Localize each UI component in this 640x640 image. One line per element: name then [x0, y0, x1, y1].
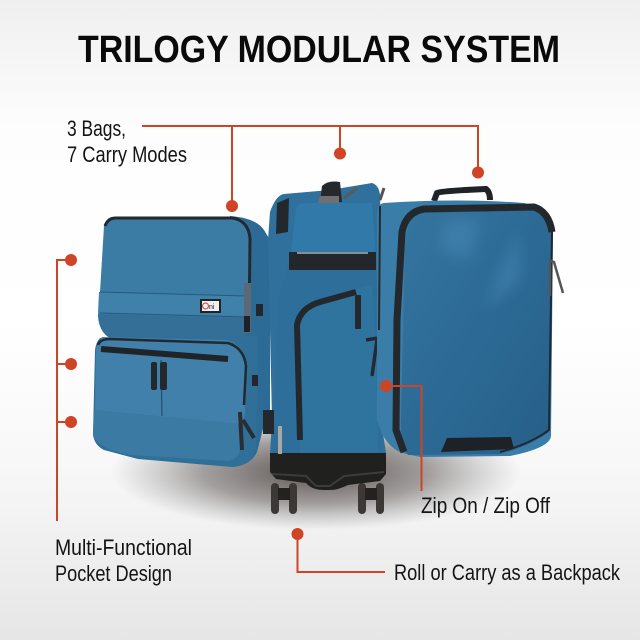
- callout: pocket connector: [57, 260, 71, 521]
- label: 3 Bags, 7 Carry Modes: 3 Bags,: [67, 116, 126, 141]
- callout lines and dots: [57, 126, 478, 572]
- curved front pocket: [297, 284, 378, 453]
- right bag: zip-on daypack: [377, 189, 563, 457]
- label: 3 Bags, 7 Carry Modes: 7 Carry Modes: [67, 142, 187, 167]
- title: TRILOGY MODULAR SYSTEM: [78, 29, 560, 71]
- label: Zip On / Zip Off: Zip On / Zip Off: [421, 493, 551, 518]
- label: Multi-Functional Pocket Design: Pocket Design: [55, 561, 172, 586]
- carry handle: [434, 189, 490, 201]
- callout: roll connector: [298, 534, 385, 572]
- callout: zip connector: [386, 386, 422, 491]
- top handle: [318, 182, 384, 203]
- callout: 3 Bags connector: [142, 126, 478, 206]
- lower pocket: [93, 336, 258, 467]
- callout dots: [65, 148, 484, 540]
- centre roller bag: [263, 182, 386, 514]
- label: Multi-Functional Pocket Design: Multi-Functional: [55, 535, 192, 560]
- logo tag: ni: [209, 304, 215, 311]
- wheels and base: [270, 452, 386, 514]
- label: Multi-Functional Pocket Design: [55, 535, 192, 586]
- zipper band: [396, 207, 552, 452]
- grab strap: [289, 252, 376, 270]
- upper pocket: [98, 217, 251, 339]
- logo tag: [200, 299, 221, 313]
- label: 3 Bags, 7 Carry Modes: [67, 116, 187, 167]
- left bag: front backpack module: [93, 216, 270, 467]
- side panel joining the bag to the centre: [230, 216, 270, 467]
